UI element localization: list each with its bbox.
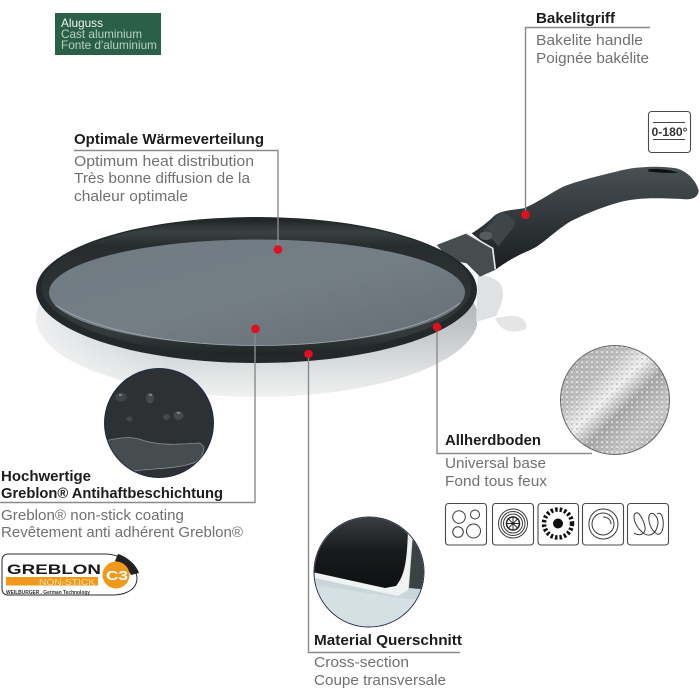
callout: bakelite handle (521, 10, 650, 219)
callout: Greblon coating (0, 325, 260, 541)
callout: cross-section (304, 350, 462, 689)
icon: 0-180 degree (648, 112, 690, 152)
material label: cast aluminium (55, 13, 161, 55)
callout: Greblon coating: Revêtement anti adhérent Greblon® (1, 524, 243, 541)
detail circle: cross-section (314, 516, 424, 628)
material label: cast aluminium: Cast aluminium (61, 27, 142, 41)
handle (437, 167, 699, 277)
pan body (36, 217, 477, 363)
material label: cast aluminium: Aluguss (61, 16, 103, 30)
callout: bakelite handle: Bakelitgriff (536, 10, 616, 27)
icon: radiant hob (492, 504, 534, 545)
white locking band (467, 233, 495, 269)
logo: Greblon non-stick C3: GREBLON (7, 561, 101, 577)
icon: induction coil (628, 504, 668, 545)
logo: Greblon non-stick C3: NON-STICK (39, 577, 95, 587)
callout: Greblon coating: Hochwertige (1, 468, 91, 485)
callout: heat distribution: Optimale Wärmeverteilung (74, 131, 264, 148)
handle grip (472, 167, 699, 270)
callout: heat distribution: Très bonne diffusion de la (74, 170, 251, 187)
icon: gas flame (538, 504, 578, 545)
logo: Greblon non-stick C3: C3 (106, 568, 128, 583)
callout: heat distribution: Optimum heat distribution (74, 153, 254, 170)
callout: bakelite handle: Bakelite handle (536, 32, 643, 49)
callout: Greblon coating: Greblon® Antihaftbeschichtung (1, 485, 223, 502)
logo: Greblon non-stick C3: WEILBURGER . German Technology (6, 590, 91, 596)
callout: universal base: Universal base (445, 455, 546, 472)
material label: cast aluminium: Fonte d'aluminium (61, 38, 157, 52)
callout: bakelite handle: Poignée bakélite (536, 50, 649, 67)
callout: universal base (433, 323, 592, 490)
detail circle: universal base (560, 346, 670, 454)
pan cooking surface (49, 240, 465, 346)
callout: heat distribution (74, 131, 282, 254)
detail circle: water droplets on coating (104, 368, 214, 478)
callout: universal base: Allherdboden (445, 432, 541, 449)
pan reflection (36, 238, 700, 398)
callout: universal base: Fond tous feux (445, 473, 548, 490)
callout: cross-section: Coupe transversale (314, 672, 446, 689)
icon: 0-180 degree: 0-180° (652, 127, 688, 139)
handle bracket (437, 233, 495, 277)
icon: ceramic hob (446, 504, 486, 545)
logo: Greblon non-stick C3 (2, 554, 139, 596)
callout: Greblon coating: Greblon® non-stick coating (1, 507, 184, 524)
handle button (479, 231, 493, 240)
callout: cross-section: Material Querschnitt (314, 632, 462, 649)
callout: heat distribution: chaleur optimale (74, 188, 188, 205)
icon: solid plate (582, 504, 624, 545)
callout: cross-section: Cross-section (314, 654, 409, 671)
